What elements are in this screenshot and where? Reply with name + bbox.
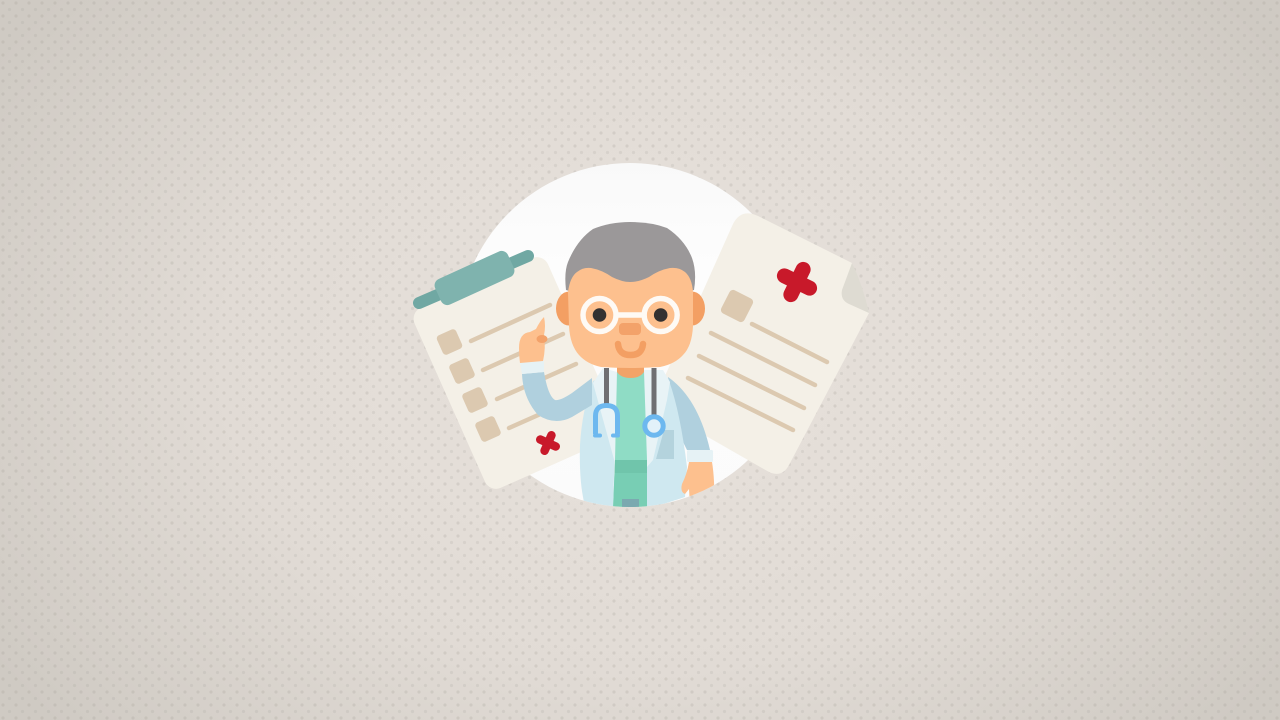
- stethoscope: [595, 368, 663, 436]
- report text lines: [688, 324, 827, 430]
- nose: [619, 323, 641, 335]
- right cuff: [687, 450, 713, 462]
- smile: [618, 344, 643, 355]
- coat right panel: [644, 370, 687, 510]
- report paper: [652, 213, 869, 474]
- clipboard checklist document: [410, 249, 623, 493]
- cuff: [520, 361, 544, 374]
- thumb: [536, 335, 548, 343]
- sleeve: [522, 372, 592, 421]
- right pupil: [654, 308, 668, 322]
- medical report document: [652, 213, 869, 474]
- left ear: [556, 292, 582, 326]
- coat pocket: [656, 430, 674, 459]
- pointing hand: [519, 317, 545, 363]
- checklist lines: [471, 305, 590, 428]
- large red cross: [778, 263, 816, 301]
- neck: [617, 366, 644, 378]
- checklist paper: [410, 253, 623, 493]
- doctor body: [580, 368, 714, 510]
- raised left arm: [519, 317, 592, 421]
- scrubs: [613, 372, 647, 510]
- right ear: [679, 292, 705, 326]
- face: [568, 268, 693, 368]
- white circle backdrop: [458, 163, 802, 507]
- right sleeve: [668, 377, 710, 450]
- glasses: [583, 298, 677, 332]
- right hand: [681, 462, 714, 496]
- left pupil: [593, 308, 606, 322]
- checkboxes: [436, 328, 502, 443]
- hair: [565, 222, 695, 300]
- coat left panel: [580, 368, 617, 510]
- clipboard clip: [419, 249, 528, 307]
- doctor character: [519, 222, 714, 510]
- report photo square: [720, 289, 754, 323]
- folded corner: [842, 263, 869, 313]
- small red cross: [537, 432, 559, 454]
